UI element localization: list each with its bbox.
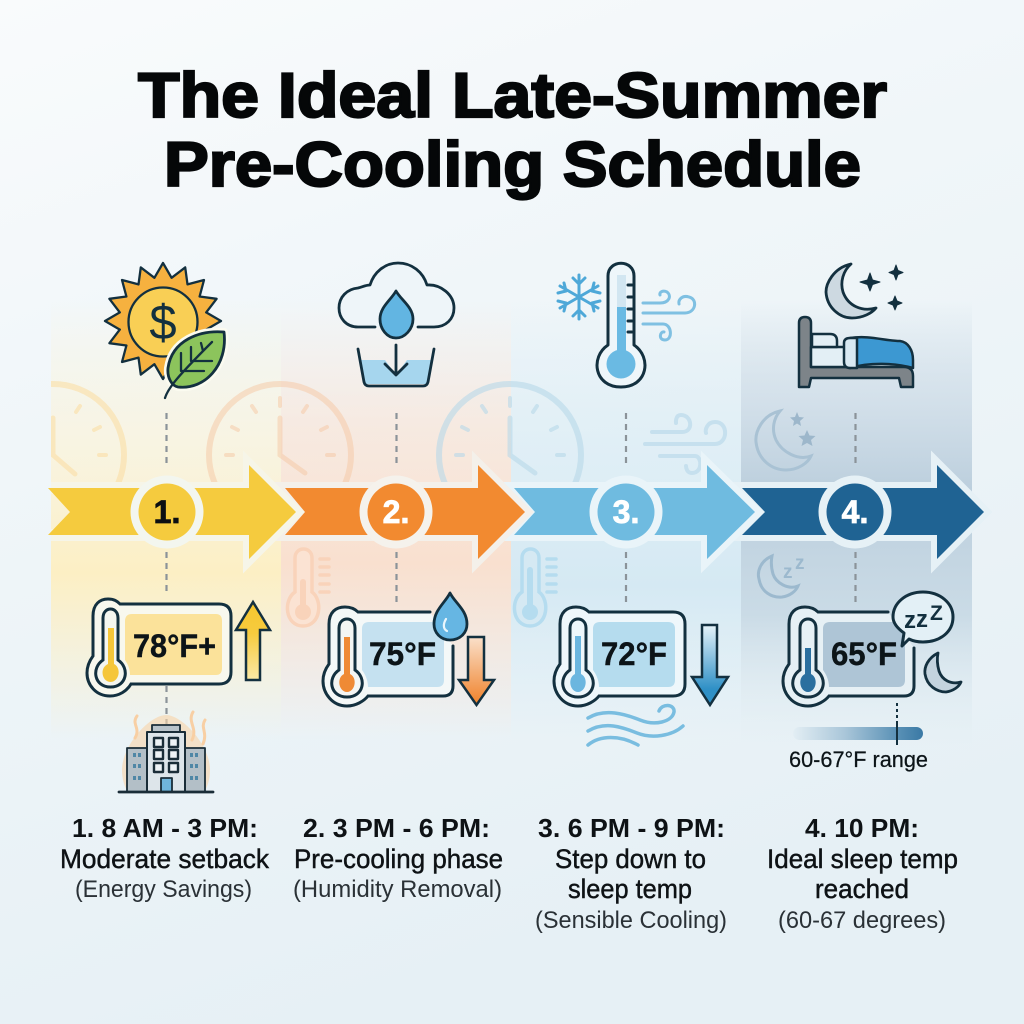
text block: step 3: Step down to <box>555 844 706 874</box>
panel: background band 4 <box>741 300 972 750</box>
dashed connector lines <box>166 413 856 724</box>
faint moon and stars <box>756 411 816 470</box>
step badge 2 <box>360 476 432 548</box>
temperature range bar: 60-67°F range <box>789 747 928 772</box>
icon: wind waves <box>588 705 683 745</box>
step badge 3 <box>590 476 662 548</box>
timeline arrow 2 <box>285 465 525 559</box>
step badge 3: 3. <box>613 494 639 530</box>
text block: step 1: 1. 8 AM - 3 PM: <box>72 813 258 843</box>
icon: cloud with water drop and basin <box>339 263 454 386</box>
arrow up <box>236 602 270 680</box>
faint thermometer 3 <box>514 549 556 626</box>
text block: step 1: (Energy Savings) <box>75 876 252 903</box>
faint thermometer 2 <box>287 549 329 626</box>
thermostat card 4: 65°F <box>831 636 897 672</box>
text block: step 2 <box>293 813 503 903</box>
thermostat card 3 <box>554 607 685 706</box>
step badge 4: 4. <box>842 494 868 530</box>
thermostat card 2 <box>323 607 453 706</box>
text block: step 3: (Sensible Cooling) <box>535 907 727 934</box>
faint clock 2 <box>206 381 354 482</box>
faint wind <box>645 415 725 473</box>
text block: step 1 <box>60 813 269 903</box>
title: Pre-Cooling Schedule <box>164 130 861 200</box>
text block: step 3: sleep temp <box>568 874 692 904</box>
title <box>138 61 887 200</box>
icon: office building with heat <box>119 712 213 792</box>
title: The Ideal Late-Summer <box>138 61 887 131</box>
step badge 2: 2. <box>383 494 409 530</box>
arrow down orange <box>459 637 494 705</box>
panel: background band 3 <box>511 300 741 740</box>
timeline arrow 3 <box>514 465 755 559</box>
icon: water drop <box>434 593 467 640</box>
speech bubble with zzz: z <box>904 607 916 634</box>
text block: step 4: 4. 10 PM: <box>805 813 919 843</box>
text block: step 4 <box>767 813 958 934</box>
icon: sun with dollar and leaf <box>105 263 224 398</box>
text block: step 1: Moderate setback <box>60 844 269 874</box>
timeline arrow 4 <box>742 465 984 559</box>
icon: sun with dollar and leaf: $ <box>149 296 177 350</box>
text block: step 2: 2. 3 PM - 6 PM: <box>303 813 490 843</box>
arrow down blue <box>692 625 728 705</box>
thermostat card 4 <box>783 607 914 706</box>
step badge 1 <box>130 476 204 548</box>
text block: step 3 <box>535 813 727 934</box>
temperature range bar <box>789 703 928 772</box>
thermostat card 1 <box>87 599 231 696</box>
step badge 4 <box>818 476 892 548</box>
text block: step 2: (Humidity Removal) <box>293 876 502 903</box>
faint moon with z letters: z <box>795 553 804 574</box>
icon: small moon <box>925 653 961 692</box>
faint moon with z letters: z <box>783 562 792 583</box>
panel: background band 1 <box>51 300 281 740</box>
thermostat card 2: 75°F <box>369 636 436 672</box>
timeline arrow 1 <box>48 465 296 559</box>
text block: step 3: 3. 6 PM - 9 PM: <box>538 813 725 843</box>
icon: thermometer with snowflake and wind <box>558 263 695 387</box>
faint clock 3 <box>436 381 584 482</box>
speech bubble with zzz: Z <box>930 602 943 625</box>
thermostat card 3: 72°F <box>601 636 667 672</box>
thermostat card 1: 78°F+ <box>133 628 216 664</box>
panel: background band 2 <box>281 300 511 740</box>
icon: bed with moon and stars <box>799 264 913 387</box>
text block: step 4: (60-67 degrees) <box>778 907 946 934</box>
faint clock 1 <box>51 381 127 482</box>
speech bubble with zzz <box>893 592 953 646</box>
speech bubble with zzz: z <box>916 606 928 633</box>
text block: step 4: reached <box>815 874 909 904</box>
text block: step 4: Ideal sleep temp <box>767 844 958 874</box>
text block: step 2: Pre-cooling phase <box>294 844 503 874</box>
step badge 1: 1. <box>154 494 180 530</box>
faint moon with z letters <box>758 553 804 597</box>
